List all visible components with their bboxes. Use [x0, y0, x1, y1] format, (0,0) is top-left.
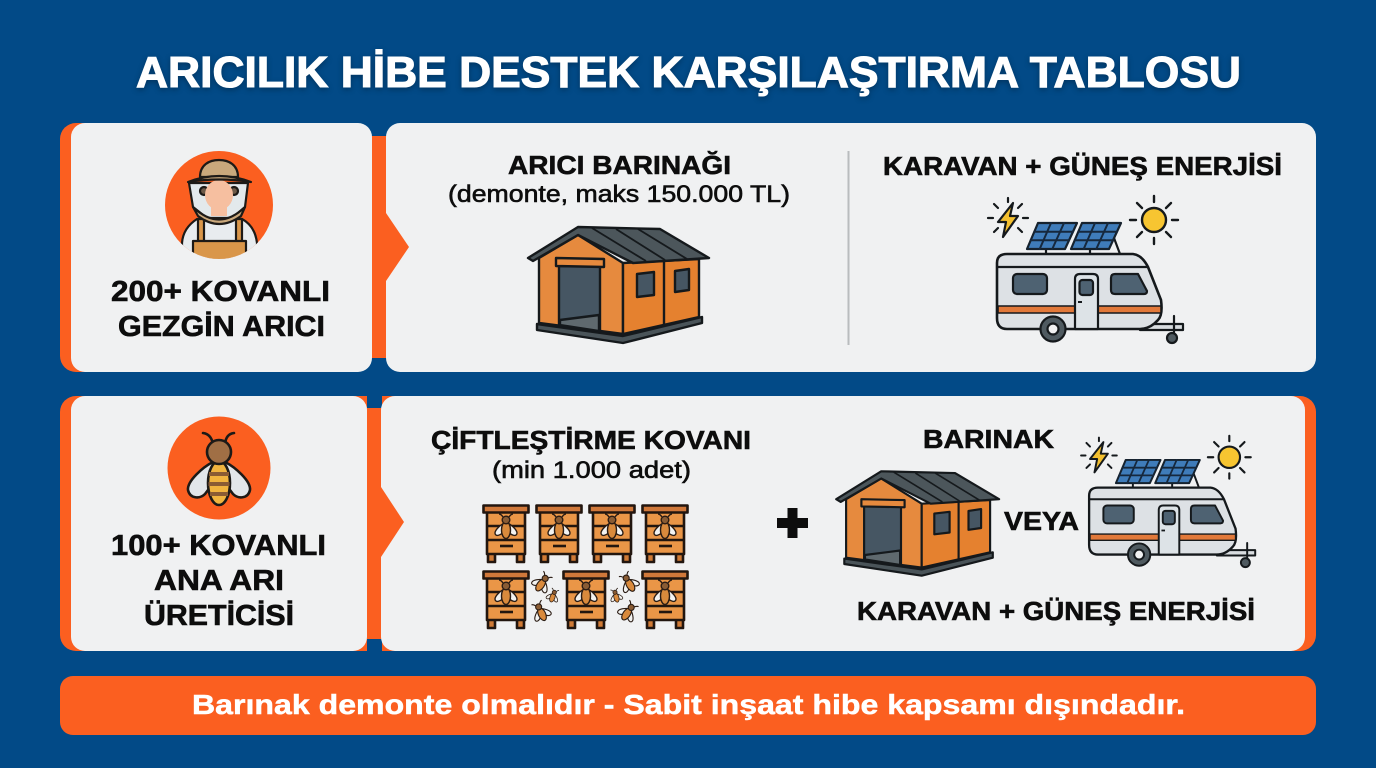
icon: caravan small	[1081, 436, 1255, 567]
callout banner	[60, 676, 1316, 735]
icon: beekeeper	[165, 151, 273, 265]
row 1 left label: 200+ KOVANLI	[111, 276, 330, 308]
row 2 left label	[111, 530, 326, 632]
mating hive heading: (min 1.000 adet)	[492, 457, 691, 484]
row 1 left card	[71, 123, 372, 372]
row 2 blue gap top cover	[367, 396, 382, 408]
plus sign	[777, 508, 808, 538]
icon: shelter small	[836, 471, 999, 576]
row 1 orange backing	[60, 123, 100, 372]
mating hive heading: ÇİFTLEŞTİRME KOVANI	[431, 425, 751, 455]
panel: row 1, 200+ hive migratory beekeeper	[60, 123, 1316, 372]
row 2 left label: ANA ARI	[154, 565, 284, 597]
row 1 left label: GEZGİN ARICI	[118, 311, 325, 343]
row 1 left label	[111, 276, 330, 343]
shelter heading	[448, 150, 790, 208]
caravan heading: KARAVAN + GÜNEŞ ENERJİSİ	[883, 151, 1282, 181]
row 2 left card	[71, 396, 367, 651]
mating hive heading	[431, 425, 751, 484]
row 1 orange connector	[365, 136, 395, 358]
icon: caravan with solar panels	[988, 196, 1183, 343]
icon: shelter	[528, 227, 709, 343]
panel: row 2, 100+ hive queen producer	[60, 396, 1316, 651]
row 2 left label: ÜRETİCİSİ	[144, 599, 294, 632]
row 2 arrow	[381, 487, 404, 557]
row 1 arrow	[386, 213, 409, 281]
icon: hives and bees	[484, 506, 688, 628]
shelter heading: (demonte, maks 150.000 TL)	[448, 181, 790, 208]
row 2 orange backing	[60, 396, 1316, 651]
row 2 right card	[381, 396, 1305, 651]
caravan label: KARAVAN + GÜNEŞ ENERJİSİ	[857, 596, 1255, 626]
or label: VEYA	[1004, 506, 1079, 536]
shelter label: BARINAK	[923, 424, 1054, 454]
icon: queen bee	[168, 416, 270, 520]
title: ARICILIK HİBE DESTEK KARŞILAŞTIRMA TABLOSU	[136, 48, 1241, 97]
banner text: Barınak demonte olmalıdır - Sabit inşaat hibe kapsamı dışındadır.	[192, 689, 1185, 720]
row 2 left label: 100+ KOVANLI	[111, 530, 326, 562]
row 1 right card	[386, 123, 1316, 372]
shelter heading: ARICI BARINAĞI	[508, 150, 731, 180]
row 2 blue gap bottom cover	[367, 639, 382, 651]
